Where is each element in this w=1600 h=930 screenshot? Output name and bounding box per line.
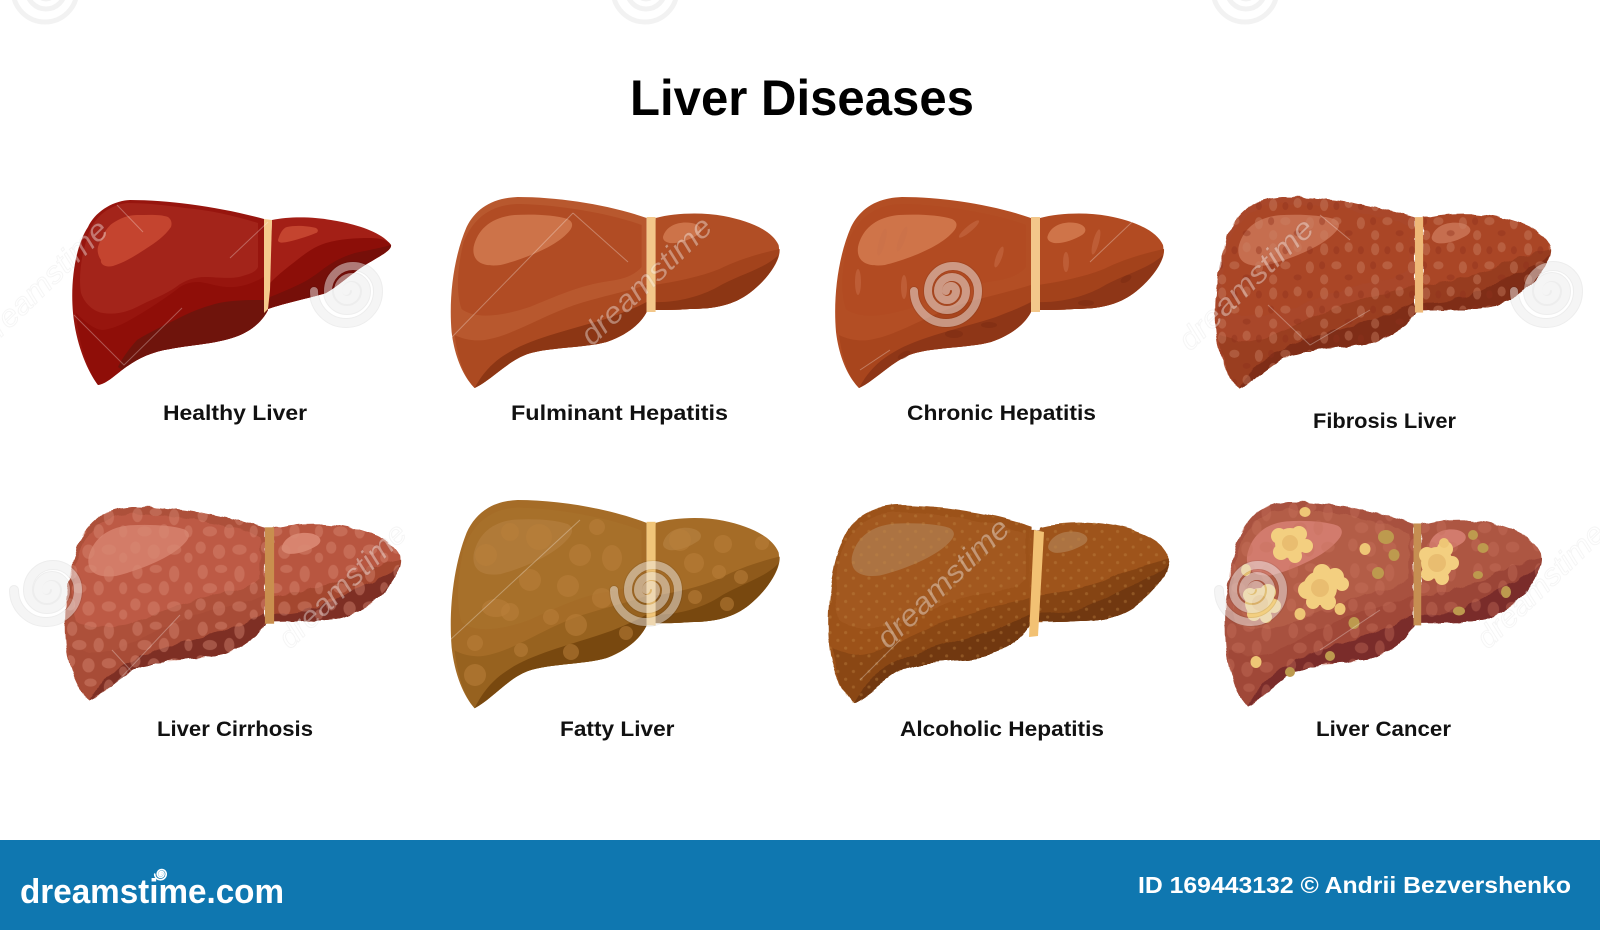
liver: cirrhosis — [65, 507, 401, 701]
falciform band — [647, 522, 656, 625]
liver: fulminant hepatitis — [451, 197, 780, 388]
falciform band — [1414, 523, 1421, 625]
falciform band — [647, 217, 656, 312]
watermark text: dreamstime — [574, 210, 719, 352]
falciform band — [265, 527, 274, 624]
falciform band — [1415, 217, 1423, 313]
tumour: upper left — [1271, 526, 1313, 563]
watermark hairlines — [74, 205, 1380, 700]
tumour: lower left — [1243, 584, 1281, 623]
liver labels: Fulminant Hepatitis — [511, 402, 728, 425]
footer banner — [0, 840, 1600, 930]
image credit: ID 169443132 © Andrii Bezvershenko — [1138, 872, 1571, 898]
small lesions — [1241, 507, 1449, 668]
tumour: right lobe — [1419, 541, 1459, 585]
fat deposits — [464, 519, 769, 686]
watermark spirals — [13, 0, 1578, 622]
liver: healthy — [72, 200, 391, 385]
watermark text: dreamstime — [1172, 212, 1321, 357]
watermark text — [0, 210, 1600, 655]
liver labels: Fatty Liver — [560, 718, 674, 741]
falciform band — [1029, 530, 1044, 637]
falciform band — [264, 219, 272, 313]
falciform band — [1031, 217, 1040, 312]
watermark text: dreamstime — [870, 512, 1017, 655]
darker lesions — [1285, 530, 1511, 677]
liver labels: Fibrosis Liver — [1313, 410, 1456, 433]
tumour: centre — [1298, 564, 1349, 610]
watermark text: dreamstime — [272, 517, 414, 655]
liver: cancer — [1225, 502, 1542, 707]
liver: fibrosis — [1215, 197, 1551, 389]
liver labels: Alcoholic Hepatitis — [900, 718, 1104, 741]
liver labels — [157, 402, 1456, 741]
liver: fatty — [451, 500, 780, 708]
icon: brand spiral — [155, 870, 166, 880]
liver labels: Liver Cancer — [1316, 718, 1451, 741]
brand wordmark: dreamstime.com — [20, 873, 284, 911]
liver: chronic hepatitis — [835, 197, 1164, 388]
liver labels: Liver Cirrhosis — [157, 718, 313, 741]
fibrotic streaks — [855, 218, 1102, 299]
liver: alcoholic hepatitis — [828, 505, 1169, 703]
liver labels: Chronic Hepatitis — [907, 402, 1096, 425]
title: Liver Diseases — [630, 70, 974, 126]
liver labels: Healthy Liver — [163, 402, 307, 425]
